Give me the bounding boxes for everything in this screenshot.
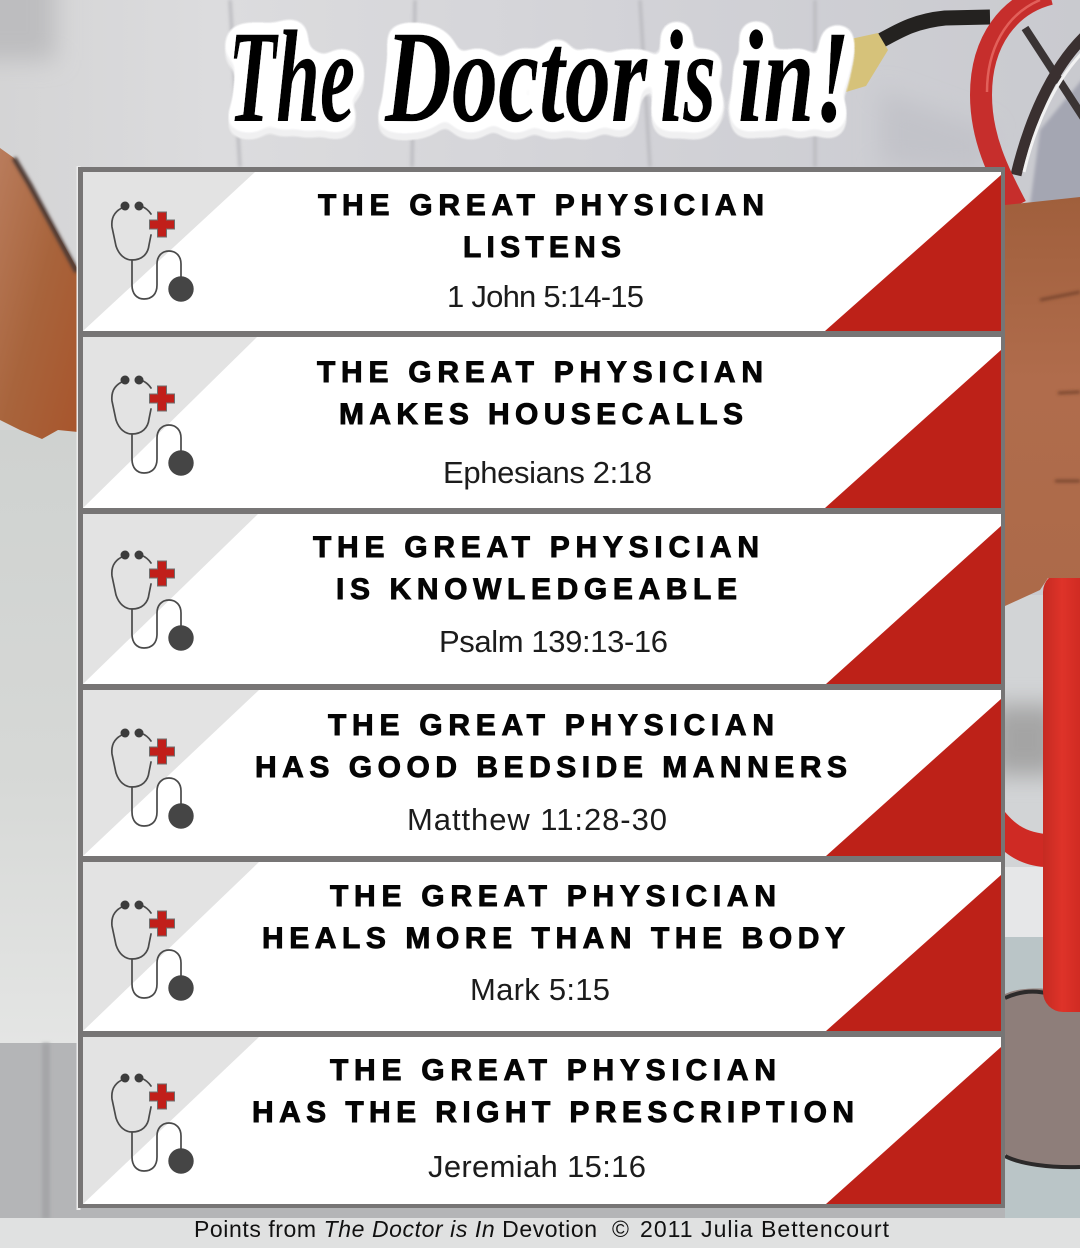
heading: has the right prescription: HAS THE RIGHT PRESCRIPTION bbox=[252, 1096, 854, 1129]
heading: heals more than the body bbox=[262, 880, 845, 955]
heading: listens bbox=[318, 189, 764, 264]
heading: makes housecalls bbox=[317, 356, 763, 431]
icon: stethoscope with red cross bbox=[112, 1074, 194, 1174]
scripture reference: Matthew 11:28-30 bbox=[407, 802, 667, 837]
title: is bbox=[660, 3, 716, 150]
row 6: has the right prescription bbox=[83, 1037, 1001, 1204]
heading: has the right prescription: THE GREAT PHYSICIAN bbox=[330, 1054, 776, 1087]
heading: heals more than the body: HEALS MORE THAN THE BODY bbox=[262, 922, 845, 955]
heading: has the right prescription bbox=[252, 1054, 854, 1129]
title: in! bbox=[738, 3, 850, 150]
footer credit: © bbox=[612, 1216, 629, 1242]
footer credit bbox=[194, 1216, 890, 1242]
title bbox=[228, 3, 850, 150]
heading: has good bedside manners: THE GREAT PHYSICIAN bbox=[328, 709, 774, 742]
heading: is knowledgeable: IS KNOWLEDGEABLE bbox=[336, 573, 737, 606]
heading: has good bedside manners bbox=[255, 709, 847, 784]
heading: is knowledgeable: THE GREAT PHYSICIAN bbox=[313, 531, 759, 564]
icon: stethoscope with red cross bbox=[112, 550, 194, 651]
scripture reference: Mark 5:15 bbox=[470, 972, 610, 1007]
row 3: is knowledgeable bbox=[83, 514, 1001, 684]
heading: has good bedside manners: HAS GOOD BEDSIDE MANNERS bbox=[255, 751, 847, 784]
scripture reference: Psalm 139:13-16 bbox=[439, 624, 668, 659]
icon: stethoscope with red cross bbox=[112, 202, 194, 302]
heading: makes housecalls: THE GREAT PHYSICIAN bbox=[317, 356, 763, 389]
row 4: has good bedside manners bbox=[83, 690, 1001, 856]
heading: makes housecalls: MAKES HOUSECALLS bbox=[339, 398, 743, 431]
footer credit: 2011 Julia Bettencourt bbox=[640, 1216, 890, 1242]
photo: stethoscope bbox=[846, 0, 1080, 1168]
icon: stethoscope with red cross bbox=[112, 376, 194, 476]
title: Doctor bbox=[384, 3, 648, 150]
footer credit: Points from The Doctor is In Devotion bbox=[194, 1216, 597, 1242]
panel frame bbox=[76, 166, 1005, 1210]
heading: heals more than the body: THE GREAT PHYSICIAN bbox=[330, 880, 776, 913]
heading: listens: THE GREAT PHYSICIAN bbox=[318, 189, 764, 222]
scripture reference: Ephesians 2:18 bbox=[443, 455, 652, 490]
photo: left forearm bbox=[0, 148, 78, 439]
scripture reference: 1 John 5:14-15 bbox=[447, 279, 644, 314]
title: The bbox=[228, 3, 355, 150]
scripture reference: Jeremiah 15:16 bbox=[428, 1149, 646, 1184]
icon: stethoscope with red cross bbox=[112, 900, 194, 1001]
heading: is knowledgeable bbox=[313, 531, 759, 606]
row 2: makes housecalls bbox=[83, 337, 1001, 508]
photo: right hand bbox=[1005, 197, 1080, 606]
heading: listens: LISTENS bbox=[463, 231, 621, 264]
row 1: listens bbox=[83, 172, 1001, 331]
row 5: heals more than the body bbox=[83, 862, 1001, 1031]
icon: stethoscope with red cross bbox=[112, 728, 194, 829]
